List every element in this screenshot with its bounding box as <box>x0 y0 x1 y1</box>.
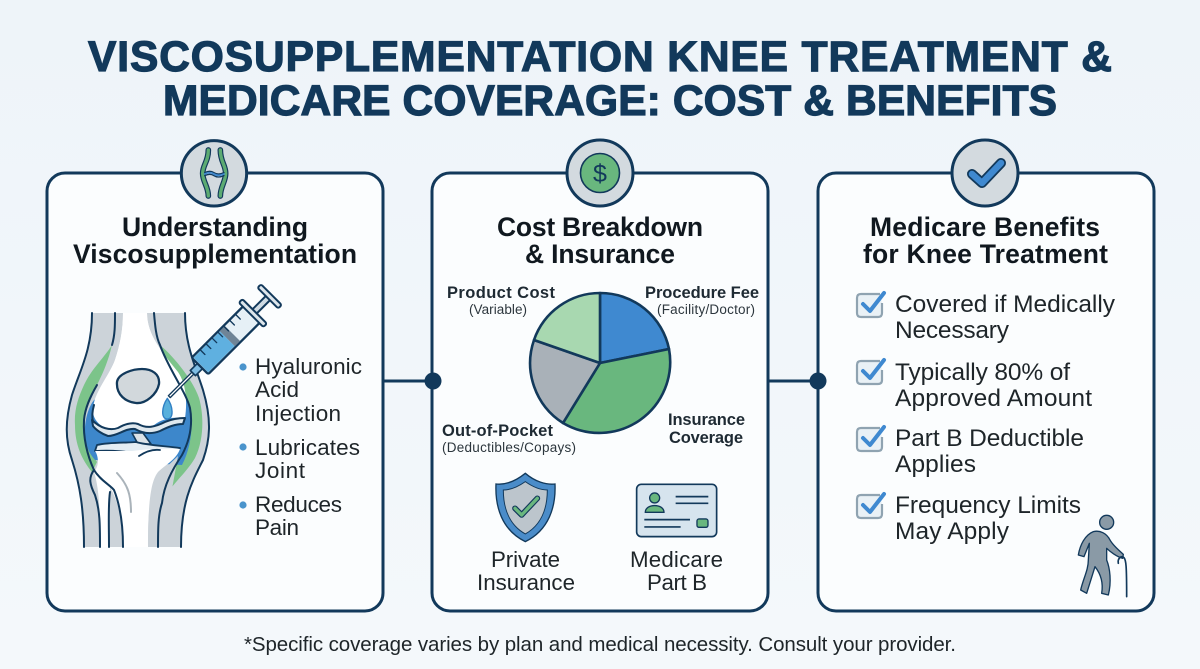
check item: eighty percent: Typically 80% of <box>895 359 1070 386</box>
icon: shield <box>496 473 555 542</box>
syringe <box>157 282 284 419</box>
bullet list: knee benefits: Hyaluronic <box>255 354 362 379</box>
check item: frequency limits: May Apply <box>895 518 1010 545</box>
pie label: out of pocket: (Deductibles/Copays) <box>442 440 576 455</box>
check item: eighty percent <box>857 359 1092 412</box>
title: MEDICARE COVERAGE: COST & BENEFITS <box>163 78 1057 125</box>
check item: eighty percent: Approved Amount <box>895 385 1092 412</box>
bullet list: knee benefits: Reduces <box>255 492 342 517</box>
title: VISCOSUPPLEMENTATION KNEE TREATMENT & <box>88 34 1112 81</box>
icon: check badge <box>952 140 1018 206</box>
icon: dollar <box>567 140 633 206</box>
heading: understanding: Viscosupplementation <box>73 239 357 269</box>
heading: cost: & Insurance <box>525 239 675 269</box>
label: private insurance <box>477 547 575 595</box>
panel: medicare benefits <box>818 140 1154 611</box>
label: medicare part b: Medicare <box>630 547 723 572</box>
panel: cost breakdown <box>432 140 768 611</box>
label: medicare part b: Part B <box>647 570 707 595</box>
connector: panels two and three <box>768 372 826 390</box>
bullet list: knee benefits: Joint <box>255 458 306 483</box>
checklist <box>857 291 1116 545</box>
check item: frequency limits <box>857 492 1081 545</box>
check item: medically necessary: Necessary <box>895 317 1010 344</box>
bullet list: knee benefits: Pain <box>255 515 299 540</box>
footnote: *Specific coverage varies by plan and medical necessity. Consult your provider. <box>244 633 956 656</box>
pie label: product cost: (Variable) <box>469 302 527 317</box>
check item: medically necessary <box>857 291 1116 344</box>
check item: frequency limits: Frequency Limits <box>895 492 1081 519</box>
heading: medicare: for Knee Treatment <box>863 239 1108 269</box>
check item: deductible: Applies <box>895 451 976 478</box>
heading: understanding: Understanding <box>122 212 308 242</box>
title <box>88 34 1112 125</box>
pie label: procedure fee: Procedure Fee <box>645 284 759 302</box>
pie label: insurance coverage: Insurance <box>668 411 745 429</box>
icon: person with cane <box>1078 515 1127 597</box>
pie label: insurance coverage <box>668 411 745 447</box>
label: medicare part b <box>630 547 723 595</box>
bullet list: knee benefits: Lubricates <box>255 435 360 460</box>
pie chart <box>530 293 670 433</box>
label: private insurance: Private <box>491 547 560 572</box>
heading: cost: Cost Breakdown <box>497 212 703 242</box>
heading: medicare <box>863 212 1108 269</box>
heading: cost <box>497 212 703 269</box>
panel: understanding viscosupplementation <box>47 141 383 611</box>
heading: medicare: Medicare Benefits <box>870 212 1100 242</box>
heading: understanding <box>73 212 357 269</box>
pie label: procedure fee: (Facility/Doctor) <box>657 302 755 317</box>
pie label: product cost: Product Cost <box>447 284 556 302</box>
bullet list: knee benefits: Acid <box>255 377 299 402</box>
icon: knee joint <box>181 141 247 206</box>
pie label: out of pocket: Out-of-Pocket <box>442 422 554 440</box>
icon: medicare card <box>637 484 717 537</box>
pie label: product cost <box>447 284 556 317</box>
bullet list: knee benefits <box>239 354 362 540</box>
pie label: out of pocket <box>442 422 576 455</box>
pie label: procedure fee <box>645 284 759 317</box>
bullet list: knee benefits: Injection <box>255 401 341 426</box>
connector: panels one and two <box>383 372 442 390</box>
illustration: knee with syringe <box>67 282 284 547</box>
outlines <box>67 313 209 547</box>
icon: dollar: $ <box>593 160 607 188</box>
label: private insurance: Insurance <box>477 570 575 595</box>
pie label: insurance coverage: Coverage <box>669 429 743 447</box>
check item: deductible: Part B Deductible <box>895 425 1084 452</box>
check item: medically necessary: Covered if Medically <box>895 291 1116 318</box>
check item: deductible <box>857 425 1084 478</box>
